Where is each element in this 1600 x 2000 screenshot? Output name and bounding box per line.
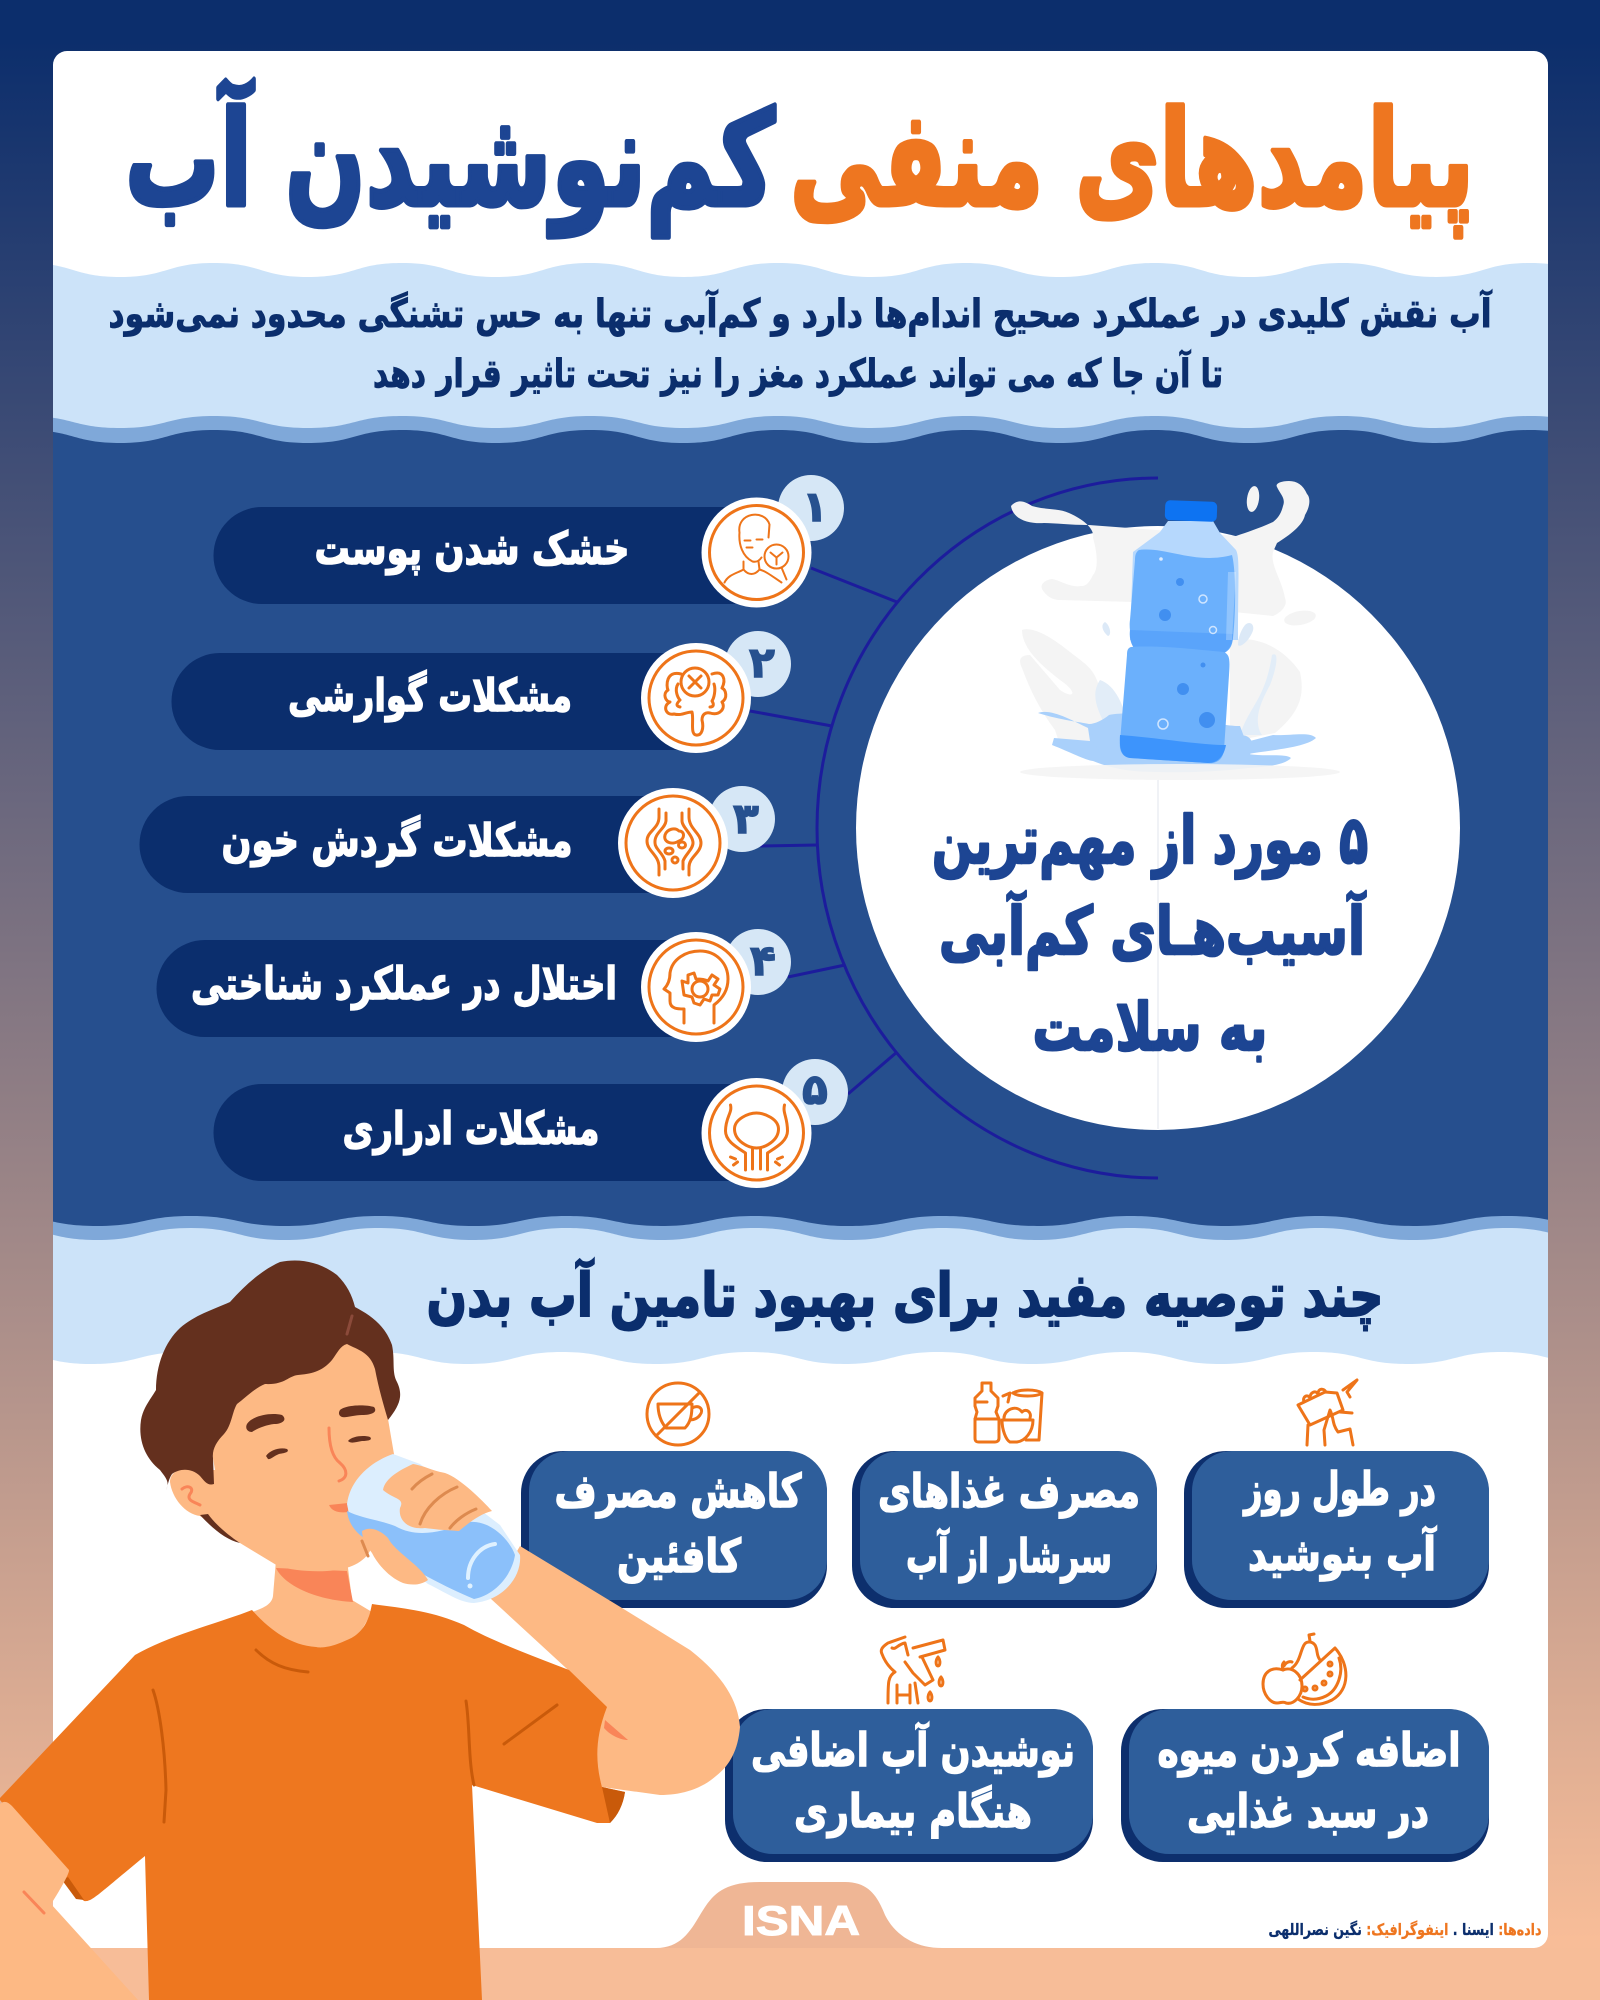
icon: no coffee (647, 1383, 709, 1445)
card: reduce caffeine: کاهش مصرف (554, 1464, 802, 1518)
eyes and brows (246, 1405, 375, 1459)
card: water-rich foods (852, 1451, 1157, 1608)
item 3: circulation problems: مشکلات گردش خون (222, 814, 572, 867)
other arm (0, 1802, 138, 2000)
item 1: dry skin: ۱ (802, 482, 828, 531)
item 5: urinary problems (213, 1059, 848, 1188)
item 2: digestive problems: مشکلات گوارشی (288, 669, 572, 722)
card: water-rich foods: مصرف غذاهای (878, 1464, 1140, 1518)
panel: recommendations band (53, 1216, 1548, 1364)
central heading: به سلامت (1032, 989, 1268, 1066)
item 2: digestive problems: ۲ (749, 638, 775, 687)
item 3: circulation problems (140, 786, 775, 898)
card: reduce caffeine (521, 1451, 827, 1608)
intro text: تا آن جا که می تواند عملکرد مغز را نیز تحت تاثیر قرار دهد (373, 349, 1223, 397)
central heading: آسیب‌هـای کم‌آبی (939, 890, 1366, 970)
footer credits: داده‌ها: ایسنا . اینفوگرافیک: نگین نصراللهی (1268, 1920, 1542, 1939)
ISNA tab: ISNA (742, 1897, 860, 1944)
panel: intro band (53, 263, 1548, 443)
card: extra water when sick: هنگام بیماری (794, 1784, 1032, 1838)
central heading (932, 802, 1368, 1066)
card: reduce caffeine: کافئین (617, 1529, 741, 1583)
card: extra water when sick (725, 1709, 1093, 1862)
central white circle (856, 526, 1460, 1130)
hand (383, 1464, 492, 1531)
illustration: bottle with splash (1011, 481, 1340, 780)
card: water-rich foods: سرشار از آب (906, 1528, 1112, 1583)
bottom strip (0, 1948, 1600, 2000)
icon: person drinking when sick (881, 1637, 945, 1703)
icon: fist holding bottle (1298, 1380, 1357, 1445)
recommendations heading: چند توصیه مفید برای بهبود تامین آب بدن (426, 1258, 1384, 1331)
card: drink during the day (1184, 1451, 1489, 1608)
face (170, 1335, 395, 1571)
title: کم‌نوشیدن آب (125, 78, 775, 238)
item 5: urinary problems: مشکلات ادراری (342, 1102, 600, 1155)
connector arc and lines (750, 478, 1158, 1178)
panel: dark blue section (53, 430, 1548, 1226)
central heading: ۵ مورد از مهم‌ترین (932, 802, 1368, 880)
title (125, 78, 1474, 238)
item 3: circulation problems: ۳ (733, 794, 759, 843)
water glass (347, 1454, 520, 1603)
intro text (108, 289, 1493, 397)
hair (140, 1261, 400, 1490)
item 4: cognitive disorder (156, 929, 791, 1042)
item 4: cognitive disorder: ۴ (750, 936, 776, 985)
card: add fruit: در سبد غذایی (1187, 1784, 1429, 1838)
item 4: cognitive disorder: اختلال در عملکرد شناختی (191, 957, 617, 1010)
card: add fruit: اضافه کردن میوه (1158, 1723, 1460, 1777)
icon: bottle and food (975, 1383, 1042, 1442)
item 1: dry skin (213, 475, 844, 608)
item 1: dry skin: خشک شدن پوست (314, 522, 630, 575)
neck (252, 1560, 372, 1650)
arm (490, 1546, 740, 1795)
illustration: man drinking water (0, 1261, 740, 2000)
shirt (0, 1604, 625, 2000)
ISNA tab (656, 1882, 942, 1948)
icon: fruit (1263, 1634, 1346, 1704)
item 5: urinary problems: ۵ (802, 1065, 828, 1114)
card: drink during the day: در طول روز (1243, 1462, 1436, 1516)
card: drink during the day: آب بنوشید (1248, 1526, 1437, 1581)
item 2: digestive problems (171, 631, 791, 753)
card: extra water when sick: نوشیدن آب اضافی (751, 1722, 1075, 1777)
card: add fruit (1121, 1709, 1489, 1862)
